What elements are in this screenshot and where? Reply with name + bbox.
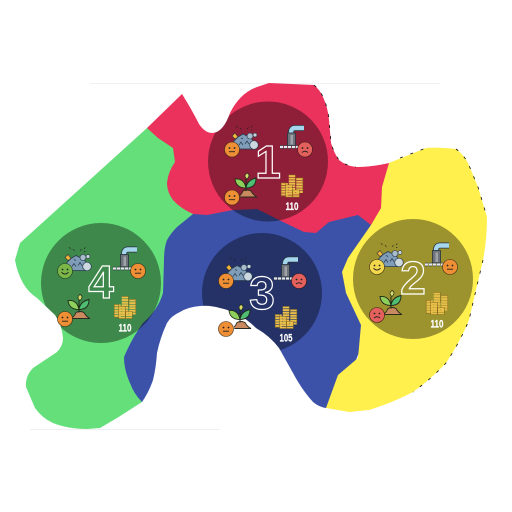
icon: coins [426,292,448,314]
value: 110 [118,322,132,334]
icon: agriculture rating [218,304,251,337]
number 2: 2 [400,252,426,304]
icon: agriculture rating [224,173,257,205]
region: blue [124,209,380,408]
value: 110 [430,318,444,330]
icon: water rating [274,260,306,288]
icon: water rating [425,246,458,274]
icon: water rating [113,250,146,278]
region: green [15,128,200,429]
icon: pollution rating [218,258,252,288]
region: red [147,83,400,240]
icon: coins [114,296,136,318]
icon: coins [275,306,297,328]
panel: region 1 [208,102,328,222]
frame lines [30,84,440,430]
panel: region 3 [202,233,322,353]
icon: pollution rating [224,126,258,157]
icon: water rating [280,128,312,157]
icon: agriculture rating [58,294,90,326]
number 3: 3 [249,267,275,319]
icon: pollution rating [370,244,403,274]
icon: agriculture rating [370,290,402,322]
panel: region 2 [353,219,473,339]
icon: pollution rating [58,248,91,278]
value: 105 [280,332,292,344]
number 1: 1 [255,136,281,188]
icon: coins [281,175,303,197]
value: 110 [286,201,298,213]
number 4: 4 [88,256,114,308]
region: yellow [326,148,487,412]
panel: region 4 [41,223,161,343]
